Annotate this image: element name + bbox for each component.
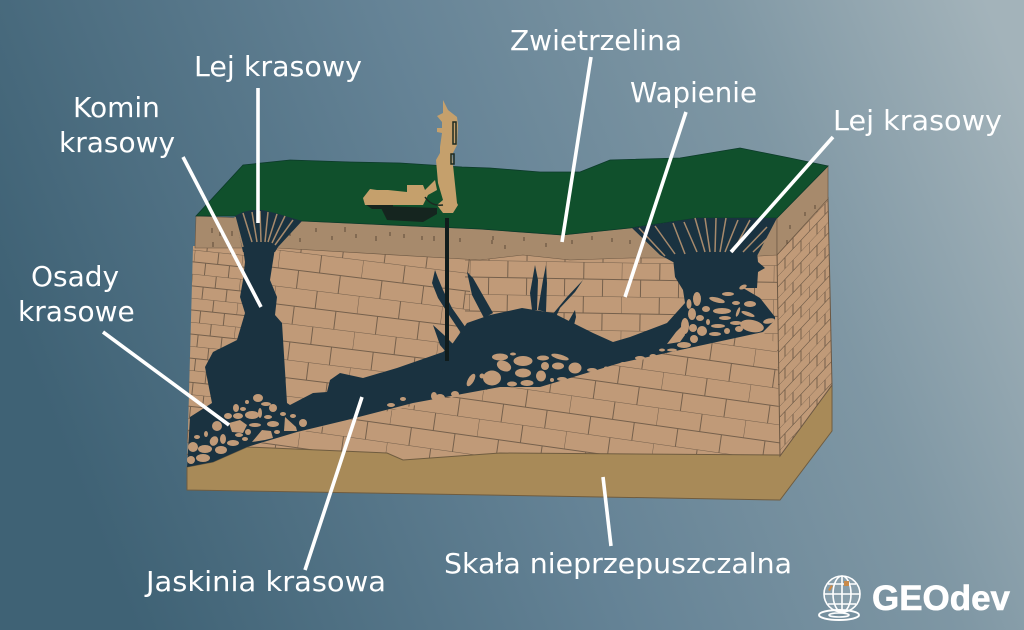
rig body: [363, 180, 437, 205]
weathered soil layer side: [777, 166, 828, 255]
limestone side face: [777, 198, 832, 456]
sediment rocks: left pile: [187, 394, 307, 464]
label: Lej krasowy left: Lej krasowy: [194, 50, 362, 83]
block diagram: [186, 100, 832, 500]
green surface: [196, 148, 828, 235]
GEOdev logo: [819, 576, 1011, 620]
wordmark: GEOdev: [872, 579, 1011, 618]
karst cave system: [187, 248, 775, 467]
leader lines: [103, 57, 833, 570]
icon: globe: [819, 576, 860, 620]
right sinkhole funnel: [632, 218, 777, 262]
soil flecks: [212, 205, 815, 249]
weathered soil layer front: [195, 216, 777, 260]
branching cave fissures: [432, 265, 583, 352]
label: Komin krasowy: krasowy: [59, 126, 175, 159]
sediment rocks: middle pile: [387, 348, 677, 407]
label: Wapienie: Wapienie: [630, 76, 757, 109]
rig mast: [436, 100, 458, 213]
rig tracks: [380, 206, 437, 222]
rig body shadow: [365, 204, 393, 209]
label: Komin krasowy: Komin: [73, 91, 160, 124]
drill rod: [445, 218, 449, 361]
label: Skala nieprzepuszczalna: Skała nieprzepuszczalna: [444, 547, 792, 580]
brick courses: [186, 240, 780, 470]
label: Osady krasowe: krasowe: [18, 295, 135, 328]
limestone front face: [187, 246, 780, 467]
impermeable rock layer: [187, 385, 832, 500]
label: Osady krasowe: Osady: [31, 260, 119, 293]
sediment rocks: right pile: [667, 283, 775, 348]
rig details: [425, 122, 456, 205]
label: Jaskinia krasowa: Jaskinia krasowa: [144, 565, 386, 598]
left sinkhole funnel: [235, 210, 302, 252]
label: Zwietrzelina: Zwietrzelina: [510, 24, 682, 57]
drilling rig: [363, 100, 458, 222]
label: Lej krasowy right: Lej krasowy: [833, 104, 1002, 137]
